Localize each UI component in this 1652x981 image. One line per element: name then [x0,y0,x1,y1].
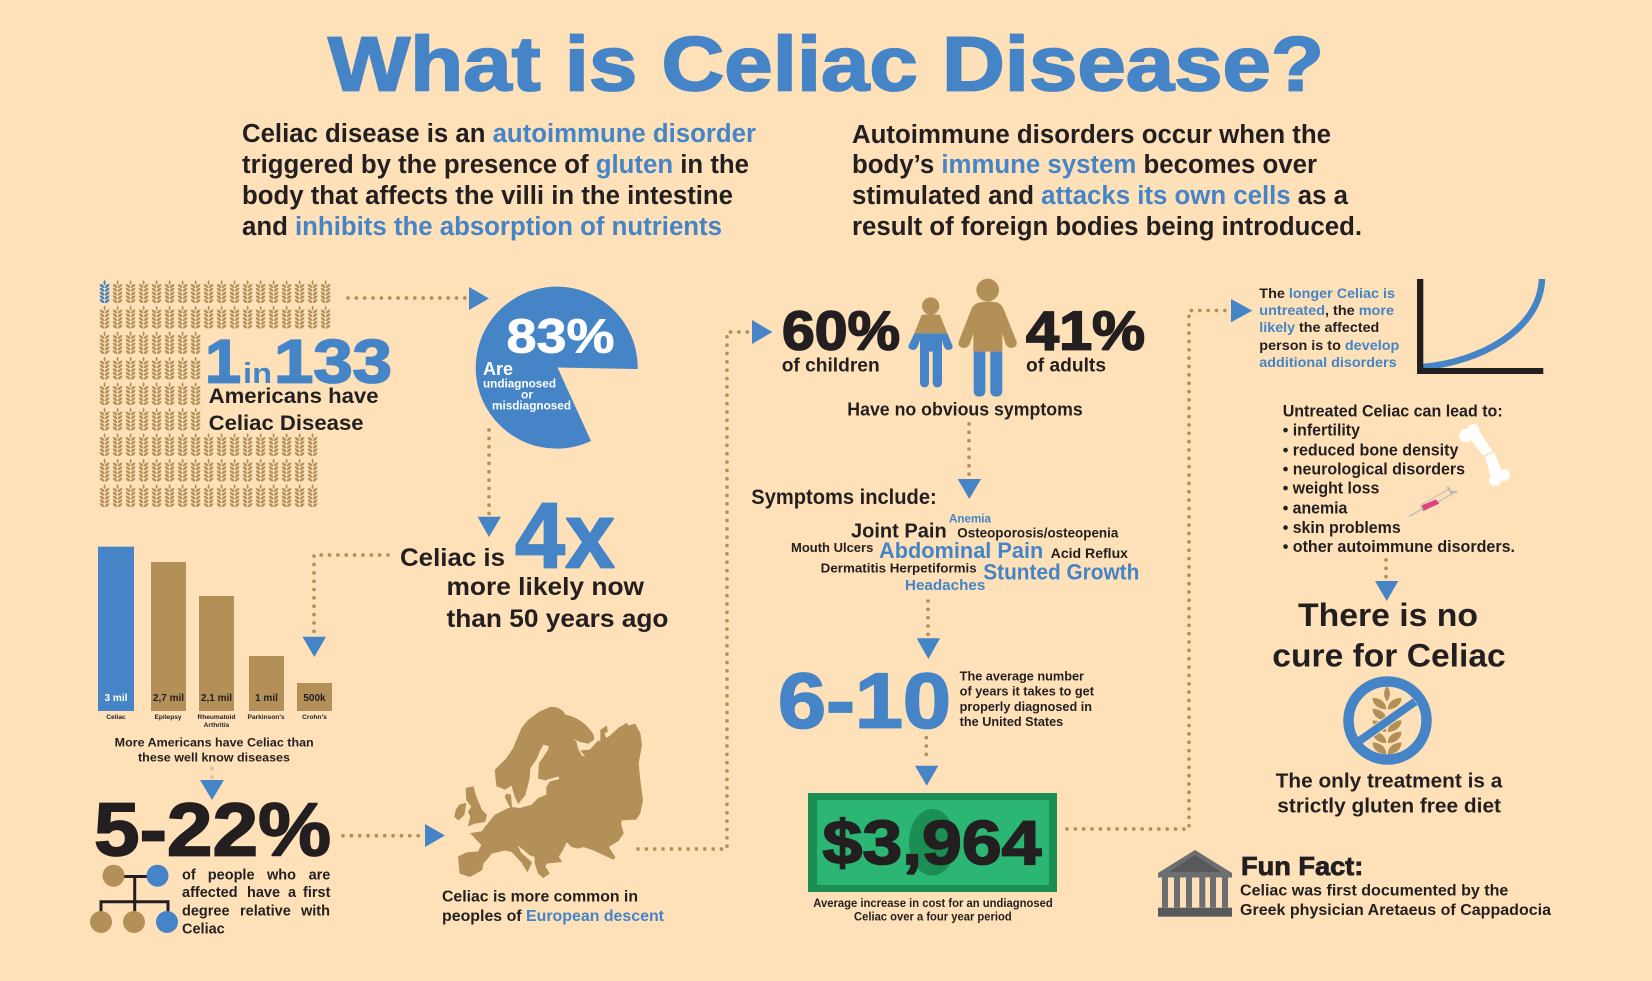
symptom word cloud: Joint Pain [851,519,947,542]
text: European descent: peoples of European descent [442,908,664,925]
text: fun fact: Greek physician Aretaeus of Cappadocia [1240,902,1551,919]
bar chart: diseases compared: Crohn's [302,714,327,721]
text: years to diagnose [960,670,1095,729]
text: only treatment: strictly gluten free diet [1277,794,1501,817]
text: cost caption: Average increase in cost for an undiagnosed [813,898,1053,910]
text: first degree relative: are [309,867,330,883]
text: fun fact: Celiac was first documented by the [1240,883,1508,900]
bar chart: diseases compared: Celiac [106,714,126,721]
text block: celiac definition: triggered by the presence of gluten in the [242,151,749,179]
text block: celiac definition: body that affects the villi in the intestine [242,182,733,210]
symptom word cloud: Anemia [949,511,991,525]
text block: celiac definition: Celiac disease is an autoimmune disorder [242,120,756,148]
text: complications list: • anemia [1283,500,1348,518]
panel: 1 in 133 wheat grid [100,280,392,507]
pie chart: 83 percent undiagnosed: Are [483,358,513,379]
text block: autoimmune definition: stimulated and attacks its own cells as a [852,182,1349,210]
symptom word cloud: Symptoms include: [751,486,937,509]
heading: no cure: cure for Celiac [1272,638,1506,674]
text: complications list: Untreated Celiac can lead to: [1283,403,1503,421]
text: first degree relative: have [247,885,280,901]
text: first degree relative: of [182,867,196,883]
text: longer untreated: person is to develop [1259,338,1399,353]
icon grid: wheat stalks [100,280,330,507]
statistic: 6-10 years: 6-10 [778,656,951,744]
text: years to diagnose: of years it takes to get [960,685,1095,699]
statistic: 5-22%: 5-22% [94,788,331,872]
statistic: 1 in 133: 133 [274,328,392,396]
text: bar chart caption: More Americans have Celiac than [115,736,314,750]
pie chart: 83 percent undiagnosed: misdiagnosed [492,398,571,412]
icon: child figure [908,297,953,387]
statistic: 4x more likely: Celiac is [400,544,505,572]
dollar bill: $3,964 [808,793,1057,892]
arrow: list to no cure [1375,560,1398,601]
icon: syringe [1409,487,1457,516]
text: complications list: • neurological disorders [1283,460,1465,478]
text: complications list: • infertility [1283,422,1360,440]
map: Europe [455,707,643,878]
text: complications list: • other autoimmune disorders. [1283,538,1515,556]
arrow: Europe to symptoms [638,320,772,849]
bar chart: diseases compared: 2,7 mil [153,693,184,704]
text: Americans have Celiac Disease [209,384,379,435]
bar chart: diseases compared: Parkinson's [247,714,285,721]
arrow: 6-10 to cost [915,738,938,786]
pie chart: 83 percent undiagnosed: or [521,387,533,401]
text: complications list: • reduced bone density [1283,442,1458,460]
text: no obvious symptoms: Have no obvious symptoms [847,400,1083,420]
bar chart: diseases compared [98,547,332,729]
text: fun fact: Fun Fact: [1241,851,1363,881]
bar chart: diseases compared: 3 mil [105,693,128,704]
statistic: 41% of adults: of adults [1026,355,1106,377]
text block: autoimmune definition [852,121,1362,241]
text: first degree relative: relative [240,903,291,919]
text: only treatment: The only treatment is a [1276,770,1503,793]
statistic: 1 in 133: 1 [205,328,241,396]
text block: celiac definition [242,120,756,241]
statistic: 1 in 133 [205,328,392,396]
text: fun fact [1240,851,1551,919]
text: first degree relative: degree [182,903,230,919]
statistic: 4x more likely: more likely now [446,573,645,601]
text: Americans have Celiac Disease: Celiac Disease [209,411,364,435]
statistic: 60% of children: of children [782,355,880,377]
icon: greek temple [1158,850,1232,917]
icon: adult figure [959,279,1017,397]
arrow: wheat to pie [348,287,489,310]
symptom word cloud: Abdominal Pain [879,538,1043,563]
bar chart: diseases compared: Arthritis [204,722,230,729]
text block: autoimmune definition: Autoimmune disorders occur when the [852,121,1331,149]
arrow: bar chart to 5-22% [200,766,224,800]
text: cost caption [813,898,1053,923]
text: first degree relative: who [266,867,296,883]
text block: autoimmune definition: body’s immune system becomes over [852,151,1317,179]
text: complications list [1283,403,1515,556]
pie chart: 83 percent undiagnosed: undiagnosed [483,376,556,390]
heading: no cure: There is no [1298,597,1478,633]
text: first degree relative: with [300,903,330,919]
text: bar chart caption: these well know diseases [138,751,290,765]
icon: broken bone [1459,424,1510,486]
symptom word cloud: Mouth Ulcers [791,540,873,555]
bar chart: diseases compared: 1 mil [255,693,278,704]
text: longer untreated: untreated , the more [1259,303,1395,318]
icon: family tree [90,865,178,933]
text: longer untreated: The longer Celiac is [1259,286,1395,301]
bar chart: diseases compared: Rheumatoid [197,714,236,721]
statistic: 41% of adults: 41% [1026,300,1145,362]
text: complications list: • skin problems [1283,519,1401,537]
statistic: 4x more likely: 4x [515,484,615,588]
arrow: to symptoms [958,424,981,499]
text: European descent: Celiac is more common in [442,889,638,906]
bar chart: diseases compared: 2,1 mil [201,693,232,704]
symptom word cloud: Dermatitis Herpetiformis [821,561,977,576]
pie chart: 83 percent undiagnosed [476,287,638,449]
statistic: 1 in 133: in [243,358,272,390]
text: first degree relative: Celiac [182,921,225,937]
text: first degree relative: a [288,885,297,901]
icon: no gluten [1348,682,1426,760]
symptom word cloud: Acid Reflux [1051,545,1128,561]
arrow: 4x to bar chart [302,555,388,657]
text: European descent [442,889,664,925]
statistic: 4x more likely: than 50 years ago [446,605,668,633]
pie chart: 83 percent undiagnosed: 83% [506,310,614,364]
symptom word cloud: Stunted Growth [983,559,1139,584]
bar chart: diseases compared: Epilepsy [154,714,182,721]
text: Americans have Celiac Disease: Americans have [209,384,379,408]
text: longer untreated: likely the affected [1259,320,1379,335]
symptom word cloud: Osteoporosis/osteopenia [957,525,1118,541]
text: years to diagnose: properly diagnosed in [960,700,1092,714]
arrow: symptoms to 6-10 [917,601,940,659]
dollar bill: $3,964: $3,964 [822,809,1042,878]
text: longer untreated [1259,286,1399,370]
symptom word cloud: Headaches [905,577,985,594]
text: first degree relative: people [208,867,255,883]
text: cost caption: Celiac over a four year period [854,911,1012,923]
line chart: rising curve [1417,279,1543,374]
text: complications list: • weight loss [1283,480,1379,498]
text: longer untreated: additional disorders [1259,355,1397,370]
text: bar chart caption [115,736,314,765]
text: years to diagnose: The average number [960,670,1084,684]
bar chart: diseases compared: 500k [303,693,326,704]
text block: celiac definition: and inhibits the absorption of nutrients [242,213,722,241]
text block: autoimmune definition: result of foreign bodies being introduced. [852,213,1362,241]
text: only treatment [1276,770,1503,817]
arrow: pie to 4x [478,430,501,537]
text: first degree relative: affected [182,885,238,901]
arrow: 5-22% to Europe [343,824,445,847]
symptom word cloud [751,486,1139,594]
heading: no cure [1272,597,1506,674]
text: years to diagnose: the United States [960,715,1063,729]
title: What is Celiac Disease? [328,22,1324,108]
statistic: 4x more likely [400,484,668,633]
statistic: 60% of children: 60% [782,300,900,362]
text: first degree relative: first [303,885,331,901]
arrow: cost to untreated [1067,299,1252,829]
